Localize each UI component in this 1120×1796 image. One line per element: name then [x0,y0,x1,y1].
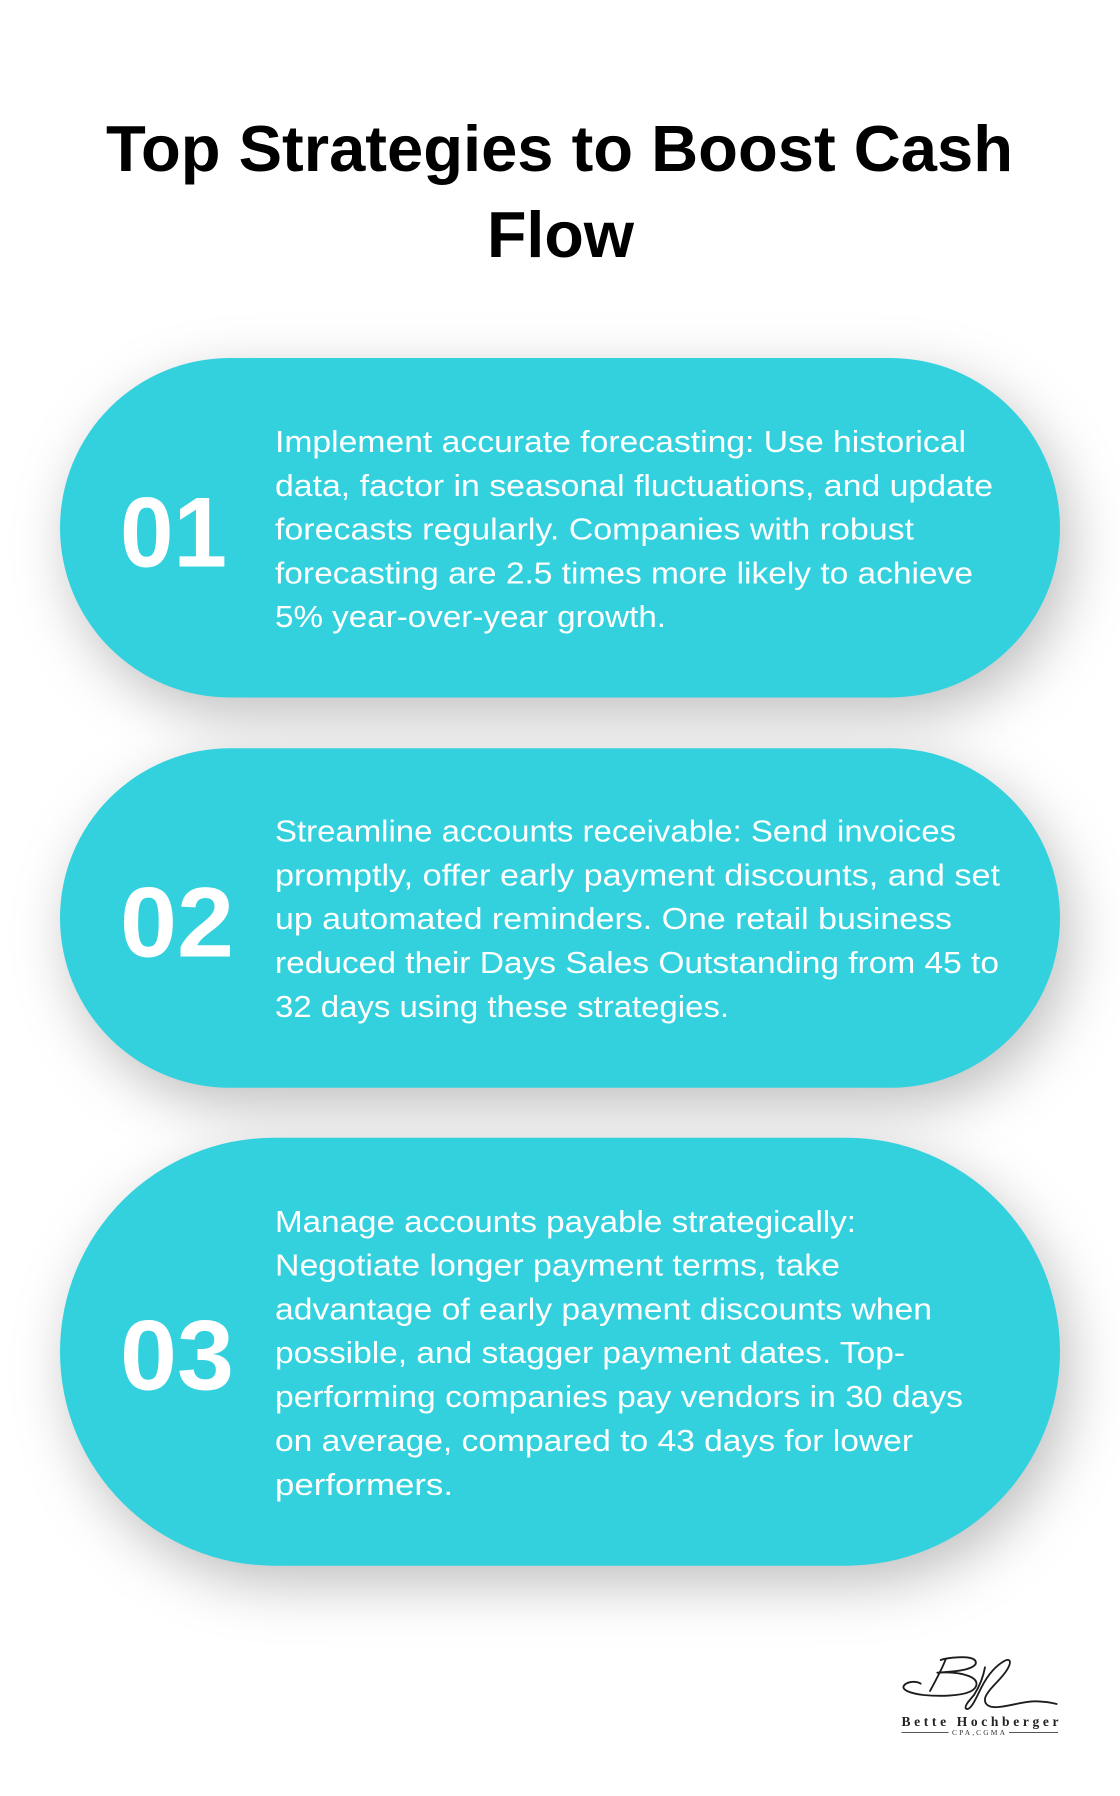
title [106,112,1013,271]
number 01: 01 [120,476,227,588]
logo name: Bette Hochberger [902,1714,1058,1729]
text block: receivables: up automated reminders. One retail business [275,901,952,936]
text block: payables: advantage of early payment discounts when [275,1291,932,1326]
text block: forecasting: Implement accurate forecasting: Use historical [275,424,966,459]
text block: forecasting: forecasting are 2.5 times more likely to achieve [275,555,973,590]
number 02: 02 [120,866,234,978]
panel: strategy 02 receivables [60,748,1060,1088]
title: Flow [487,198,634,271]
text block: payables: on average, compared to 43 days for lower [275,1423,913,1458]
text block: forecasting: data, factor in seasonal fluctuations, and update [275,468,993,503]
text block: receivables: 32 days using these strategies. [275,989,729,1024]
text block: forecasting: 5% year-over-year growth. [275,599,666,634]
text block: payables: possible, and stagger payment dates. Top- [275,1335,905,1370]
logo: Bette Hochberger signature [902,1657,1058,1737]
text block: forecasting [275,424,993,634]
text block: payables: performers. [275,1467,453,1502]
text block: payables: Negotiate longer payment terms, take [275,1248,840,1283]
number 03: 03 [120,1300,234,1410]
text block: payables [275,1204,963,1502]
text block: receivables: Streamline accounts receivable: Send invoices [275,814,956,848]
text block: payables: Manage accounts payable strategically: [275,1204,856,1239]
panel: strategy 01 forecasting [60,358,1060,698]
text block: receivables [275,814,1000,1024]
text block: receivables: promptly, offer early payment discounts, and set [275,857,1000,892]
text block: payables: performing companies pay vendors in 30 days [275,1379,963,1414]
title: Top Strategies to Boost Cash [106,112,1013,185]
text block: receivables: reduced their Days Sales Outstanding from 45 to [275,945,999,980]
icon: BH signature [903,1657,1057,1709]
panel: strategy 03 payables [60,1138,1060,1566]
logo subtitle: CPA,CGMA [952,1728,1006,1737]
text block: forecasting: forecasts regularly. Companies with robust [275,512,914,547]
